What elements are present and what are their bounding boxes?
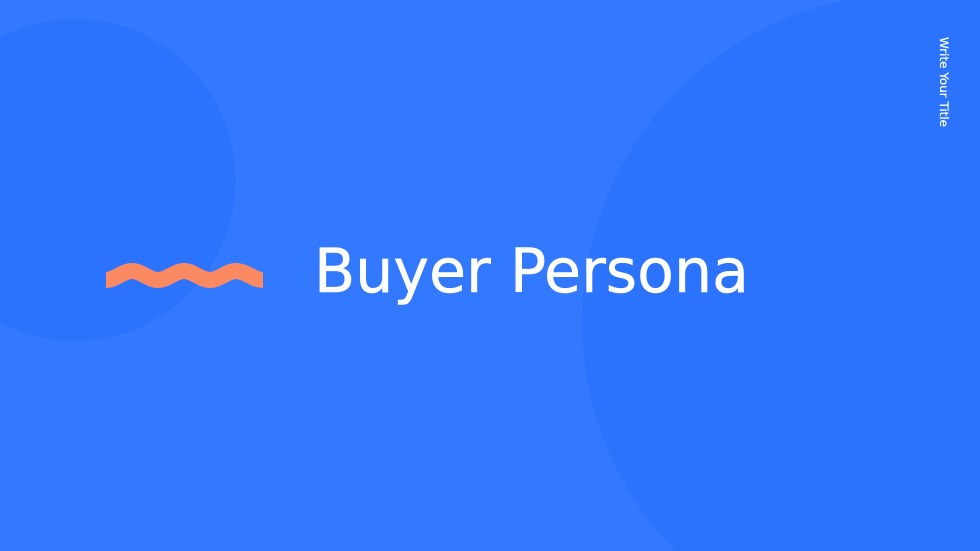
decorative circle: left — [0, 19, 236, 341]
decorative circle: right — [582, 0, 980, 551]
vertical label: Write Your Title — [937, 37, 951, 127]
icon: orange wave — [106, 271, 263, 280]
title: Buyer Persona — [314, 236, 749, 307]
